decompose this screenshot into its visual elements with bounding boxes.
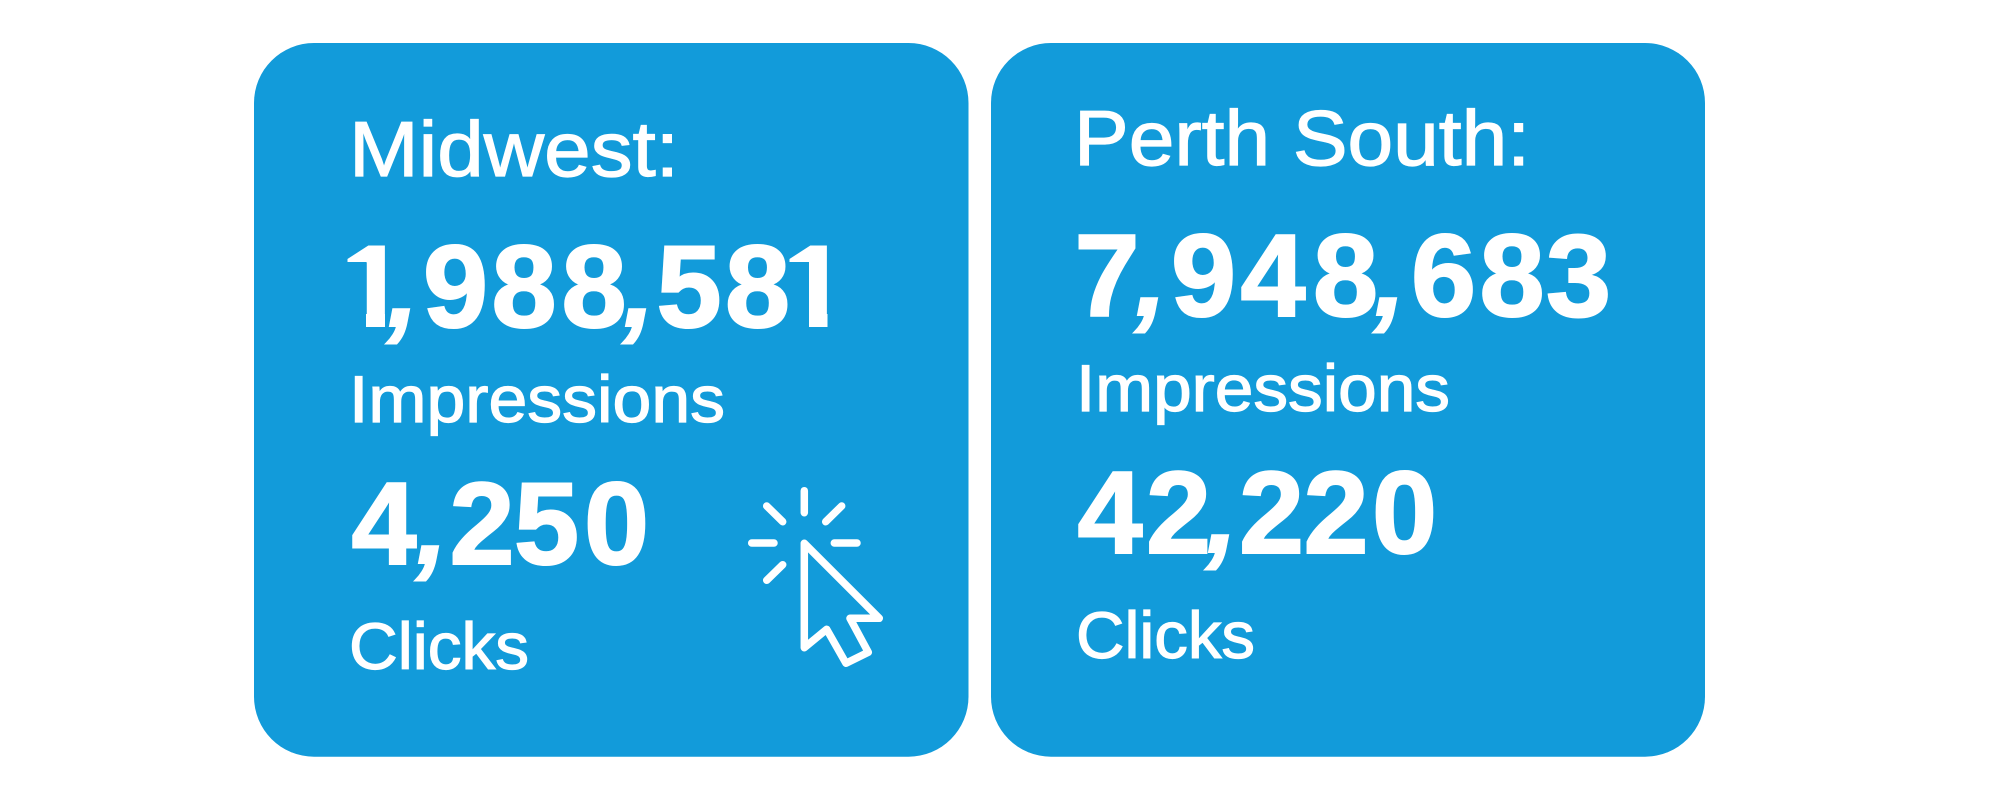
number: Midwest impressions: 1 bbox=[340, 221, 406, 352]
label: Perth South impressions: Impressions bbox=[1076, 351, 1450, 425]
number: Perth South clicks: 220 bbox=[1239, 447, 1437, 578]
number: Midwest impressions: , bbox=[385, 225, 419, 350]
number: Midwest impressions: 58 bbox=[656, 221, 790, 352]
number: Midwest impressions: 1 bbox=[782, 221, 848, 352]
label: Midwest clicks: Clicks bbox=[349, 609, 529, 683]
number: Midwest impressions: 988 bbox=[423, 221, 627, 352]
panel: Midwest bbox=[254, 43, 968, 757]
number: Perth South impressions: 683 bbox=[1411, 210, 1611, 341]
number: Midwest impressions: , bbox=[621, 225, 655, 350]
number: Midwest clicks: 250 bbox=[449, 458, 649, 589]
number: Perth South impressions: 948 bbox=[1171, 210, 1378, 341]
number: Perth South impressions: , bbox=[1372, 214, 1406, 339]
panel: Perth South bbox=[991, 43, 1705, 757]
label: Midwest impressions: Impressions bbox=[349, 362, 725, 436]
number: Perth South impressions: 7 bbox=[1074, 210, 1140, 341]
number: Midwest clicks: , bbox=[414, 462, 448, 587]
number: Midwest impressions bbox=[348, 244, 828, 344]
number: Perth South impressions: , bbox=[1133, 214, 1167, 339]
heading: Midwest: Midwest: bbox=[349, 105, 679, 193]
number: Perth South clicks: , bbox=[1204, 451, 1238, 576]
icon: cursor click bbox=[752, 491, 879, 663]
label: Perth South clicks: Clicks bbox=[1076, 598, 1255, 672]
number: Midwest clicks: 4 bbox=[351, 458, 417, 589]
number: Perth South clicks: 42 bbox=[1077, 447, 1211, 578]
heading: Perth South: Perth South: bbox=[1074, 94, 1530, 182]
